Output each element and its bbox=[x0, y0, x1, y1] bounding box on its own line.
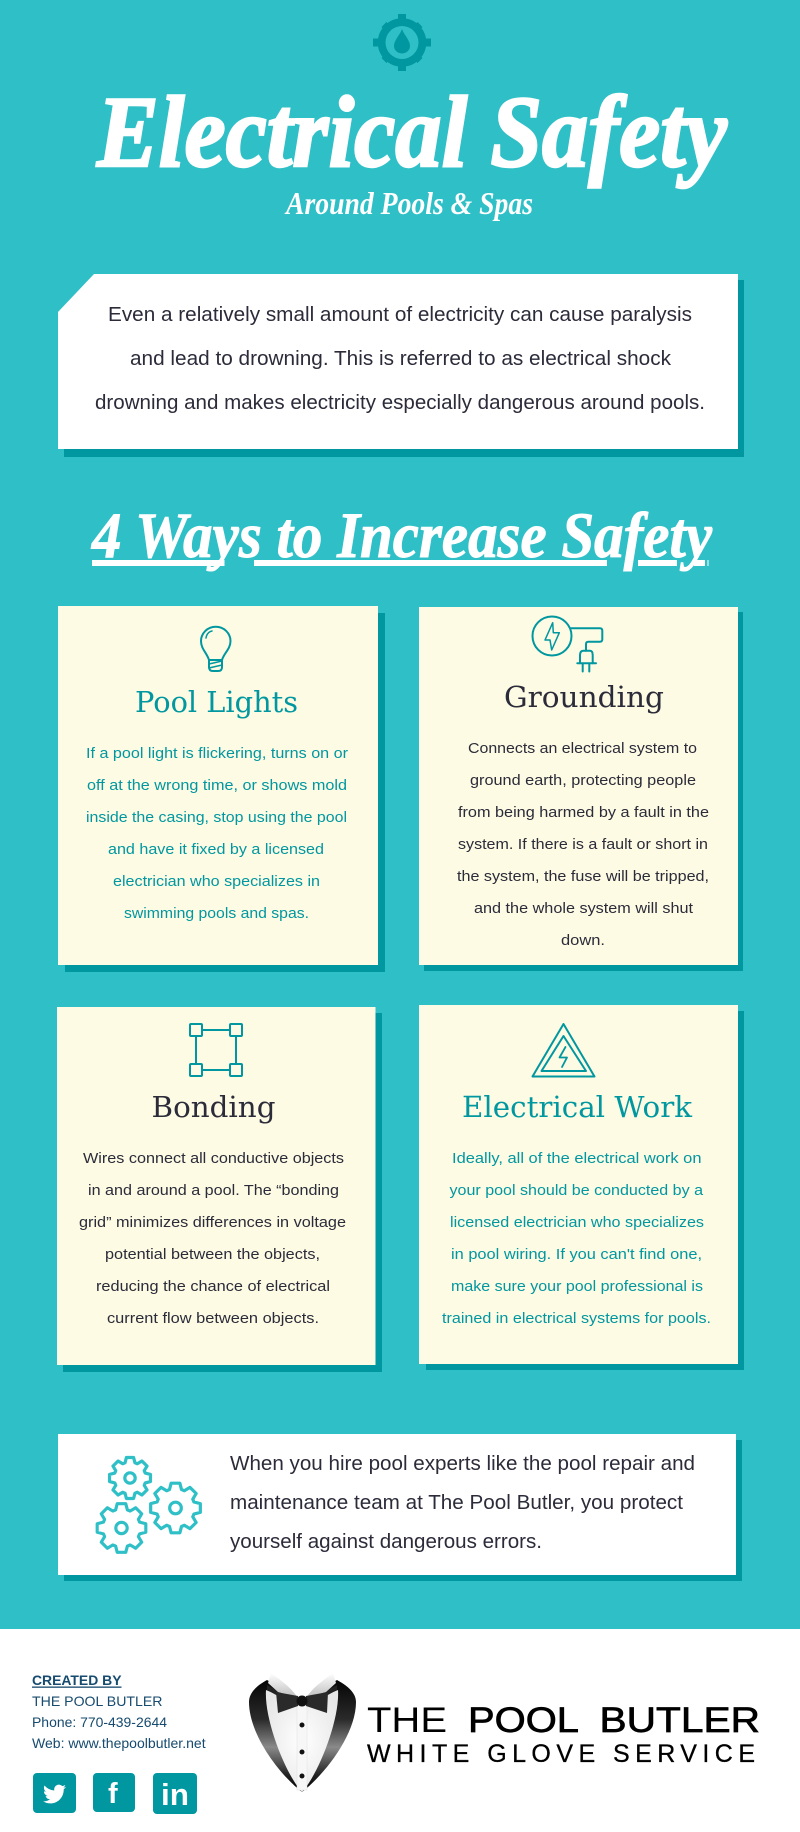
body: grounding: the system, the fuse will be tripped, bbox=[457, 868, 709, 885]
heading: bonding: Bonding bbox=[152, 1090, 276, 1124]
closing text bbox=[230, 1453, 695, 1553]
icon: linkedin: in bbox=[161, 1777, 189, 1812]
icon: facebook: f bbox=[108, 1778, 118, 1810]
icon: facebook bbox=[93, 1773, 135, 1812]
panel: grounding bbox=[419, 607, 743, 971]
panel: electrical work bbox=[419, 1005, 744, 1370]
body: grounding: system. If there is a fault or short in bbox=[458, 836, 708, 853]
body: grounding: and the whole system will shut bbox=[474, 900, 694, 917]
body: electrical work: make sure your pool professional is bbox=[451, 1278, 703, 1295]
closing text: maintenance team at The Pool Butler, you protect bbox=[230, 1492, 683, 1514]
body: electrical work: Ideally, all of the electrical work on bbox=[452, 1150, 702, 1167]
section heading: 4 Ways to Increase Safety bbox=[90, 500, 713, 572]
panel: footer bbox=[0, 1629, 800, 1832]
body: bonding: Wires connect all conductive objects bbox=[83, 1150, 344, 1167]
body: bonding: potential between the objects, bbox=[105, 1246, 320, 1263]
credits text: Web: www.thepoolbutler.net bbox=[32, 1735, 206, 1751]
intro text bbox=[95, 304, 705, 414]
body: pool lights: electrician who specializes in bbox=[113, 873, 320, 890]
icon: warning triangle bbox=[532, 1024, 594, 1076]
body: pool lights bbox=[86, 745, 348, 922]
credits text: THE POOL BUTLER bbox=[32, 1693, 162, 1709]
icon: bonding grid bbox=[190, 1024, 242, 1076]
intro text: and lead to drowning. This is referred to as electrical shock bbox=[130, 348, 672, 370]
subtitle: Around Pools & Spas bbox=[284, 185, 533, 221]
heading: pool lights: Pool Lights bbox=[135, 685, 298, 719]
icon: grounding plug bbox=[532, 616, 602, 672]
body: pool lights: and have it fixed by a licensed bbox=[108, 841, 324, 858]
panel: pool lights bbox=[58, 606, 385, 972]
body: electrical work: trained in electrical systems for pools. bbox=[442, 1310, 711, 1327]
logo: wordmark: POOL bbox=[468, 1701, 579, 1740]
body: grounding: Connects an electrical system to bbox=[468, 740, 697, 757]
body: bonding bbox=[79, 1150, 346, 1327]
icon: three gears bbox=[97, 1458, 200, 1552]
body: bonding: reducing the chance of electrical bbox=[96, 1278, 330, 1295]
body: pool lights: off at the wrong time, or shows mold bbox=[87, 777, 347, 794]
body: bonding: in and around a pool. The “bonding bbox=[88, 1182, 339, 1199]
body: bonding: grid” minimizes differences in voltage bbox=[79, 1214, 346, 1231]
credits text: CREATED BY bbox=[32, 1672, 122, 1688]
body: grounding: ground earth, protecting people bbox=[470, 772, 696, 789]
body: pool lights: If a pool light is flickering, turns on or bbox=[86, 745, 348, 762]
closing text: When you hire pool experts like the pool repair and bbox=[230, 1453, 695, 1475]
body: electrical work: your pool should be conducted by a bbox=[450, 1182, 704, 1199]
icon: twitter bbox=[33, 1773, 76, 1813]
body: grounding bbox=[457, 740, 709, 949]
heading: electrical work: Electrical Work bbox=[462, 1090, 692, 1124]
logo: wordmark bbox=[367, 1701, 760, 1768]
body: grounding: down. bbox=[561, 932, 605, 949]
intro text: Even a relatively small amount of electricity can cause paralysis bbox=[108, 304, 692, 326]
body: grounding: from being harmed by a fault in the bbox=[458, 804, 709, 821]
panel: bonding bbox=[57, 1007, 382, 1372]
title: Electrical Safety bbox=[96, 76, 728, 189]
icon: linkedin bbox=[153, 1773, 197, 1814]
body: pool lights: inside the casing, stop using the pool bbox=[86, 809, 347, 826]
icon: gear with water drop bbox=[373, 14, 431, 71]
logo: wordmark: BUTLER bbox=[600, 1701, 760, 1740]
panel: closing message bbox=[58, 1434, 742, 1581]
body: electrical work: licensed electrician who specializes bbox=[450, 1214, 704, 1231]
credits text: Phone: 770-439-2644 bbox=[32, 1714, 167, 1730]
body: bonding: current flow between objects. bbox=[107, 1310, 319, 1327]
credits text bbox=[32, 1672, 206, 1751]
logo: wordmark: THE bbox=[367, 1701, 447, 1740]
body: pool lights: swimming pools and spas. bbox=[124, 905, 309, 922]
logo: tuxedo bbox=[249, 1673, 356, 1792]
body: electrical work bbox=[442, 1150, 711, 1327]
intro text: drowning and makes electricity especially dangerous around pools. bbox=[95, 392, 705, 414]
icon: light bulb bbox=[201, 627, 230, 671]
closing text: yourself against dangerous errors. bbox=[230, 1531, 542, 1553]
heading: grounding: Grounding bbox=[504, 680, 664, 714]
logo: wordmark: WHITE GLOVE SERVICE bbox=[367, 1740, 755, 1768]
body: electrical work: in pool wiring. If you can't find one, bbox=[451, 1246, 702, 1263]
panel: intro bbox=[58, 274, 744, 457]
